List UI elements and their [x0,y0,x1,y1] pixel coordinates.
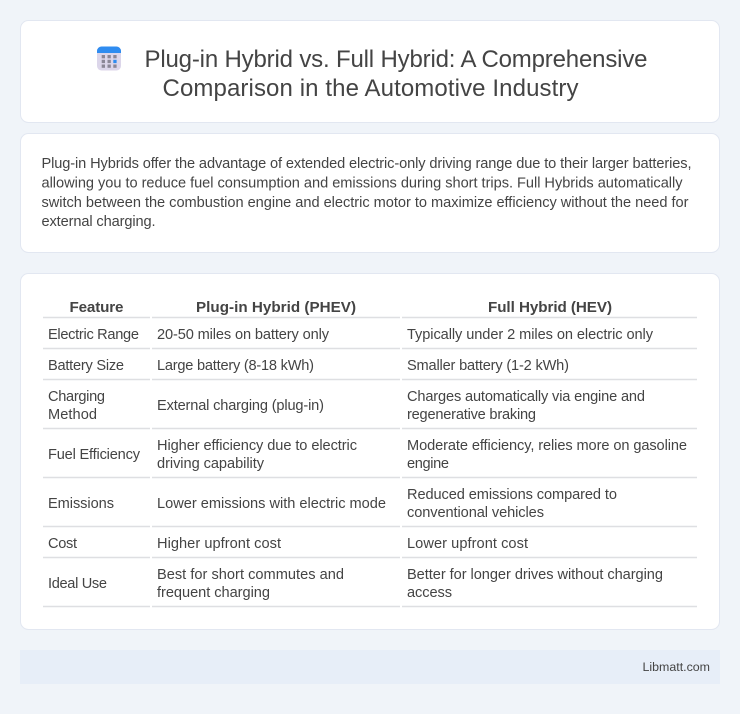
title: Plug-in Hybrid vs. Full Hybrid: A Comprehensive [144,46,648,73]
row: fuel efficiency: driving capability [157,456,265,472]
row: cost [48,536,528,552]
row: emissions [48,487,617,521]
row: charging method [48,389,645,423]
row: electric range: Electric Range [48,327,139,343]
row: electric range: 20-50 miles on battery only [157,327,330,343]
row: battery size: Smaller battery (1-2 kWh) [407,358,569,374]
row: ideal use: Better for longer drives without charging [407,567,663,583]
row: charging method: regenerative braking [407,407,536,423]
row: fuel efficiency: Fuel Efficiency [48,447,141,463]
panel: introduction [20,134,720,252]
table header: Full Hybrid (HEV) [488,299,612,316]
row: fuel efficiency: Higher efficiency due to electric [157,438,357,454]
row: emissions: conventional vehicles [407,505,544,521]
row: fuel efficiency: engine [407,456,449,472]
row: charging method: Charging [48,389,105,405]
row: fuel efficiency [48,438,687,472]
intro paragraph: allowing you to reduce fuel consumption and emissions during short trips. Full Hybrids automatically [42,176,683,192]
title [144,46,648,102]
intro paragraph: switch between the combustion engine and electric motor to maximize efficiency without the need for [42,195,689,211]
row: ideal use: frequent charging [157,585,270,601]
intro paragraph [42,156,692,230]
row: cost: Lower upfront cost [407,536,528,552]
row: charging method: Charges automatically via engine and [407,389,645,405]
row: ideal use: access [407,585,452,601]
intro paragraph: external charging. [42,214,156,230]
footer [20,650,720,684]
panel: comparison table [20,274,720,630]
row: electric range: Typically under 2 miles on electric only [407,327,654,343]
title: Comparison in the Automotive Industry [162,75,578,102]
row: battery size: Large battery (8-18 kWh) [157,358,314,374]
row: electric range [48,327,654,343]
row: charging method: External charging (plug-in) [157,398,324,414]
row: cost: Higher upfront cost [157,536,281,552]
footer credit: Libmatt.com [642,660,710,674]
row: fuel efficiency: Moderate efficiency, relies more on gasoline [407,438,687,454]
row: emissions: Reduced emissions compared to [407,487,617,503]
table header [70,299,612,316]
row: emissions: Lower emissions with electric mode [157,496,386,512]
intro paragraph: Plug-in Hybrids offer the advantage of extended electric-only driving range due to their larger batteries, [42,156,692,172]
row: ideal use [48,567,663,601]
icon: calendar [97,46,121,70]
row: emissions: Emissions [48,496,114,512]
row: ideal use: Ideal Use [48,576,107,592]
row: battery size [48,358,569,374]
row: ideal use: Best for short commutes and [157,567,344,583]
table header: Plug-in Hybrid (PHEV) [196,299,356,316]
row: charging method: Method [48,407,97,423]
row: battery size: Battery Size [48,358,124,374]
table header: Feature [70,299,124,316]
row: cost: Cost [48,536,77,552]
panel: title card [20,20,720,122]
